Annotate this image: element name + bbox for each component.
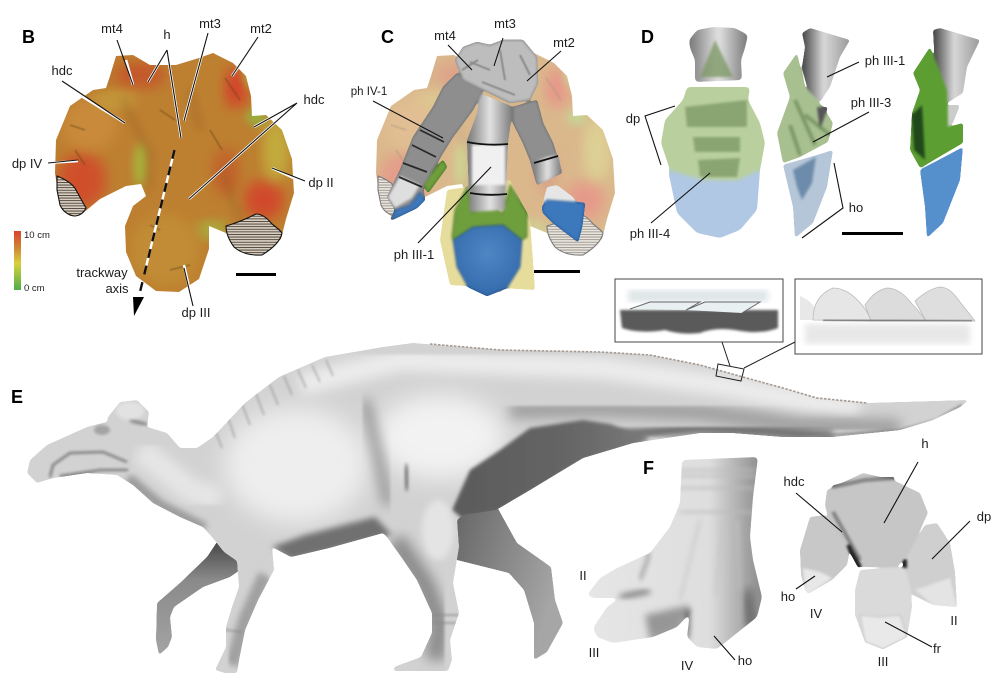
distal phalanx digit II <box>543 185 577 203</box>
ankle rings <box>226 615 460 632</box>
view 3 green <box>910 47 963 168</box>
eye area <box>94 425 110 435</box>
label dp IV: dp IV <box>12 156 43 171</box>
foot plantar view <box>800 473 957 649</box>
metatarsal heads <box>455 40 538 103</box>
heel shading <box>832 478 895 560</box>
view 3 <box>910 28 980 238</box>
label mt3 C: mt3 <box>494 16 516 31</box>
white bright phalanx <box>472 145 505 185</box>
label ph IV-1: ph IV-1 <box>351 86 387 98</box>
view 1 inner bones <box>685 40 747 177</box>
view 2 hoof <box>783 150 833 238</box>
scale base line <box>823 320 972 321</box>
blue hoof digit II <box>542 200 585 242</box>
view 2 green <box>777 53 833 163</box>
scale bumps <box>813 288 871 321</box>
panel: E dinosaur life reconstruction <box>11 343 969 673</box>
panel: inset scale views <box>615 279 982 381</box>
blue hoof digit IV <box>392 192 425 220</box>
plantar hoof II <box>915 578 957 607</box>
leg bands <box>680 470 755 512</box>
panel: B footprint height map <box>50 50 300 295</box>
panel letter C: C <box>381 27 394 47</box>
inset box left <box>615 279 783 342</box>
leader lines <box>48 33 305 306</box>
locator rectangle on tail <box>716 364 744 381</box>
view 2 bone <box>802 28 850 102</box>
pale top texture <box>628 290 768 302</box>
view 3 hoof <box>920 147 963 238</box>
scale label 0 cm: 0 cm <box>24 283 45 294</box>
label dp III: dp III <box>182 305 210 320</box>
label hdc F: hdc <box>784 474 805 489</box>
tendons <box>680 524 699 596</box>
torso highlight <box>224 407 368 523</box>
leader lines halo <box>48 40 300 305</box>
label fr: fr <box>933 641 942 656</box>
label ph III-1 D: ph III-1 <box>865 53 905 68</box>
scale bar D <box>842 232 903 235</box>
label mt2 C: mt2 <box>553 35 575 50</box>
view 1 bone <box>689 27 748 82</box>
label trackway axis: trackway <box>76 265 128 280</box>
metatarsal texture <box>462 50 530 95</box>
bright tip digit IV <box>388 176 420 208</box>
far hind limb <box>440 505 563 660</box>
height colour scale bar <box>14 231 21 290</box>
bones digit III <box>467 93 513 212</box>
tail tip edge <box>800 405 962 437</box>
body silhouette with shading <box>27 343 969 673</box>
toe shadows <box>645 605 690 640</box>
panel B labels and leader lines <box>12 16 334 320</box>
faded footprint <box>371 50 621 295</box>
label h F: h <box>921 436 929 451</box>
label dp D: dp <box>626 111 640 126</box>
label ph III-1 C: ph III-1 <box>394 247 434 262</box>
scale label 10 cm: 10 cm <box>24 230 50 241</box>
mouth line and jaw shade <box>50 452 128 477</box>
label mt4 C: mt4 <box>434 28 456 43</box>
hoof digit III green <box>452 185 527 240</box>
panel: C skeleton over footprint <box>351 16 621 296</box>
label mt4: mt4 <box>101 21 123 36</box>
joint dark lines <box>467 142 558 195</box>
label hdc left: hdc <box>52 63 73 78</box>
bones digit II <box>513 100 562 185</box>
leader lines C <box>373 38 561 243</box>
label ph III-4: ph III-4 <box>630 226 670 241</box>
scale edges <box>630 302 760 313</box>
hip highlight <box>375 395 505 479</box>
label ph III-3: ph III-3 <box>851 95 891 110</box>
footprint surface <box>50 50 300 295</box>
label IV lateral: IV <box>681 658 693 673</box>
view 1 green soft tissue <box>661 87 765 180</box>
view 1 <box>661 27 765 238</box>
trackway axis dashed line <box>140 150 174 292</box>
foreleg tone <box>232 575 265 665</box>
neck underside tone <box>128 478 205 528</box>
rump underside shadow <box>452 420 650 519</box>
panel letter F: F <box>643 458 654 478</box>
belly shadow <box>272 517 392 560</box>
view 2 small bone <box>817 107 828 130</box>
label III lateral: III <box>589 645 599 660</box>
flank dark patch <box>405 465 408 490</box>
scale bar C <box>534 270 580 273</box>
inset box right <box>795 279 982 354</box>
dorsal ribbing <box>215 360 333 448</box>
leader lines F <box>714 462 970 660</box>
thigh highlight <box>422 500 454 560</box>
label III plantar: III <box>878 654 888 669</box>
tan fill under digit III <box>440 180 535 290</box>
neck highlight <box>140 450 220 500</box>
dark junction <box>848 545 905 568</box>
scale bar B <box>236 273 276 276</box>
heel <box>825 473 928 567</box>
surface pits <box>70 78 240 270</box>
small left scale <box>800 296 822 320</box>
view 3 small bone <box>948 105 960 127</box>
view 2 green folds <box>790 100 830 155</box>
view 3 bone <box>933 28 980 103</box>
view 2 <box>777 28 850 238</box>
label axis: axis <box>105 281 129 296</box>
label hdc right: hdc <box>304 92 325 107</box>
tail underside soft shadow <box>590 428 833 436</box>
green tissue digit IV <box>423 160 447 193</box>
panel letter B: B <box>22 27 35 47</box>
panel letter E: E <box>11 387 23 407</box>
label ho D: ho <box>849 200 863 215</box>
plantar hoof III <box>860 615 907 649</box>
digit III pad <box>855 567 912 649</box>
dorsal scales <box>430 344 867 403</box>
trackway direction arrowhead <box>133 297 144 316</box>
connector lines <box>722 342 795 368</box>
label mt2: mt2 <box>250 21 272 36</box>
foot lateral view <box>587 457 762 649</box>
view 1 blue hoof <box>668 170 760 238</box>
rings digit IV <box>399 130 444 187</box>
hatched area digit II <box>226 214 282 255</box>
digit IV pad <box>800 515 849 594</box>
tail tone band <box>510 408 900 428</box>
panel letter D: D <box>641 27 654 47</box>
label IV plantar: IV <box>810 606 822 621</box>
view 3 dark green shadow <box>912 105 925 160</box>
label II plantar: II <box>950 613 958 628</box>
leader lines D <box>645 62 869 238</box>
panel: F feet detail <box>579 436 991 673</box>
panel: D phalanx three views <box>626 27 980 241</box>
phalanx digit II <box>533 154 562 185</box>
label mt3: mt3 <box>199 16 221 31</box>
blue hoof digit III <box>453 225 522 296</box>
crest highlight <box>116 402 144 420</box>
label II lateral: II <box>579 568 587 583</box>
skeleton and soft tissue <box>387 40 585 296</box>
bones digit IV <box>387 73 483 220</box>
label ho lateral: ho <box>738 653 752 668</box>
label ho plantar: ho <box>781 589 795 604</box>
far forelimb <box>156 530 250 655</box>
label h: h <box>163 27 171 42</box>
back highlight <box>300 360 860 412</box>
label dp II: dp II <box>308 175 334 190</box>
digit II pad <box>903 523 957 607</box>
label dp F: dp <box>977 509 991 524</box>
dark scale band <box>620 310 778 334</box>
plantar hoof IV <box>803 568 832 594</box>
hind leg tone <box>395 540 440 660</box>
view 2 inner dark blue <box>793 157 816 200</box>
shoulder hip crease <box>365 400 388 505</box>
hatched area digit IV <box>57 176 86 216</box>
crest shadow <box>130 420 147 425</box>
pale lower texture <box>805 324 970 344</box>
